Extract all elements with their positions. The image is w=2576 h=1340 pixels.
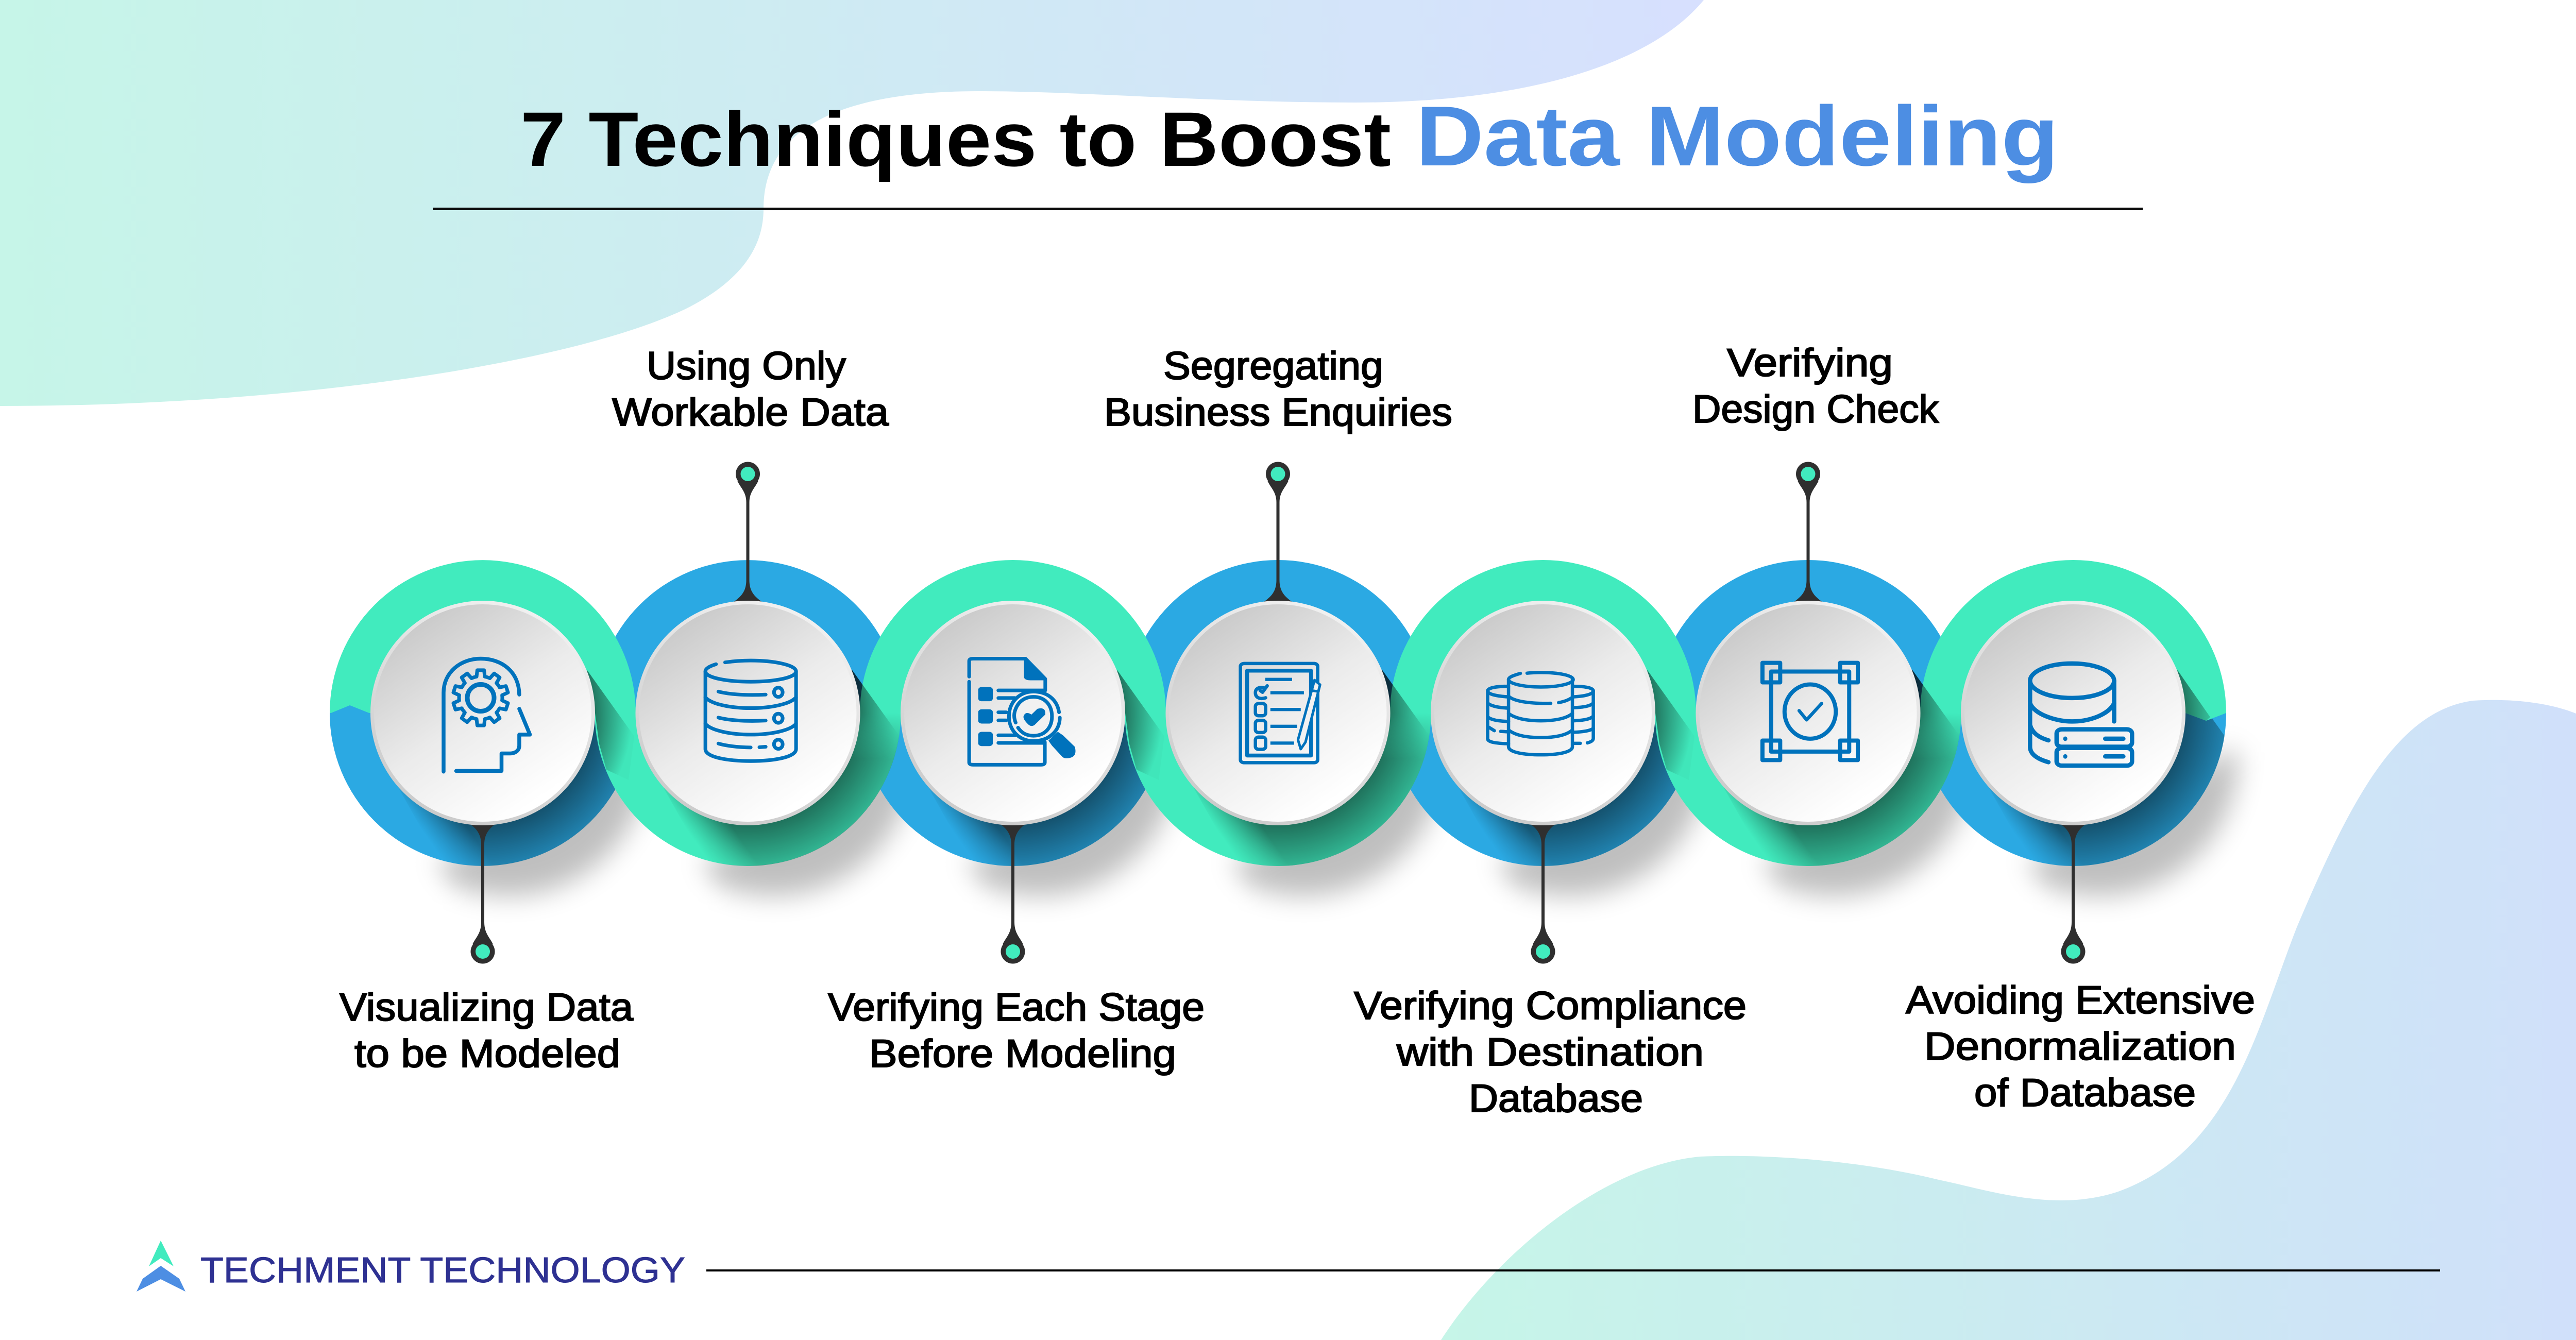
- icon: document with magnifier: [969, 659, 1076, 765]
- connector pin: [997, 822, 1029, 963]
- label: Verifying: [1727, 341, 1893, 385]
- label: with Destination: [1396, 1030, 1704, 1074]
- label: Segregating: [1163, 344, 1383, 388]
- label: [612, 344, 889, 434]
- step 1: Visualizing Data to be Modeled: [340, 601, 634, 1076]
- footer rule: [706, 1269, 2440, 1271]
- background blob: top left: [0, 0, 1704, 406]
- step 2: Using Only Workable Data: [612, 344, 889, 825]
- label: [828, 986, 1205, 1076]
- step 3: Verifying Each Stage Before Modeling: [828, 601, 1205, 1076]
- connector pin: [731, 462, 765, 604]
- label: Business Enquiries: [1104, 391, 1452, 434]
- title: [520, 89, 2059, 183]
- label: Before Modeling: [869, 1032, 1176, 1076]
- label: [340, 986, 634, 1076]
- title: Data Modeling: [1416, 89, 2059, 183]
- connector pin: [1791, 462, 1825, 604]
- icon: design frame with check: [1762, 663, 1858, 760]
- disc: [370, 601, 595, 825]
- label: Design Check: [1692, 387, 1939, 431]
- label: Verifying Each Stage: [828, 986, 1205, 1029]
- disc: [636, 601, 860, 825]
- icon: head with gear: [444, 659, 530, 772]
- label: [1692, 341, 1939, 431]
- logo mark: [137, 1241, 185, 1292]
- disc: [1431, 601, 1655, 825]
- label: [1906, 978, 2255, 1115]
- label: [1354, 984, 1747, 1121]
- blue ribbon: [330, 560, 2226, 866]
- label: Database: [1469, 1077, 1643, 1121]
- step 5: Verifying Compliance with Destination Database: [1354, 601, 1747, 1121]
- title: 7 Techniques to Boost: [520, 96, 1391, 182]
- disc: [1165, 601, 1390, 825]
- company name: TECHMENT TECHNOLOGY: [200, 1250, 685, 1290]
- title rule: [433, 208, 2143, 210]
- label: to be Modeled: [354, 1032, 620, 1076]
- background blob: bottom right: [1441, 700, 2576, 1340]
- label: Visualizing Data: [340, 986, 634, 1029]
- label: Avoiding Extensive: [1906, 978, 2255, 1022]
- label: Using Only: [647, 344, 846, 388]
- step 6: Verifying Design Check: [1692, 341, 1939, 825]
- label: [1104, 344, 1452, 434]
- label: Workable Data: [612, 391, 889, 434]
- disc: [901, 601, 1125, 825]
- cast shadows on blue ribbon: [399, 670, 2276, 919]
- disc: [1696, 601, 1921, 825]
- footer logo: [137, 1241, 685, 1292]
- disc: [1961, 601, 2185, 825]
- icon: checklist with pen: [1241, 664, 1320, 762]
- step 4: Segregating Business Enquiries: [1104, 344, 1452, 825]
- step 7: Avoiding Extensive Denormalization of Database: [1906, 601, 2255, 1115]
- icon: database server: [705, 660, 796, 761]
- soft drop shadows under ribbon: [369, 618, 2238, 896]
- connector pin: [1261, 462, 1295, 604]
- cast shadows on green ribbon: [587, 670, 2210, 919]
- label: of Database: [1974, 1071, 2196, 1115]
- connector pin: [1527, 822, 1559, 963]
- label: Verifying Compliance: [1354, 984, 1747, 1028]
- green ribbon: [330, 560, 2226, 866]
- blue ribbon end notch: [330, 705, 370, 714]
- connector pin: [467, 822, 499, 963]
- icon: stacked databases: [1487, 672, 1594, 755]
- connector pin: [2057, 822, 2089, 963]
- label: Denormalization: [1924, 1025, 2236, 1068]
- icon: database with server: [2030, 664, 2132, 766]
